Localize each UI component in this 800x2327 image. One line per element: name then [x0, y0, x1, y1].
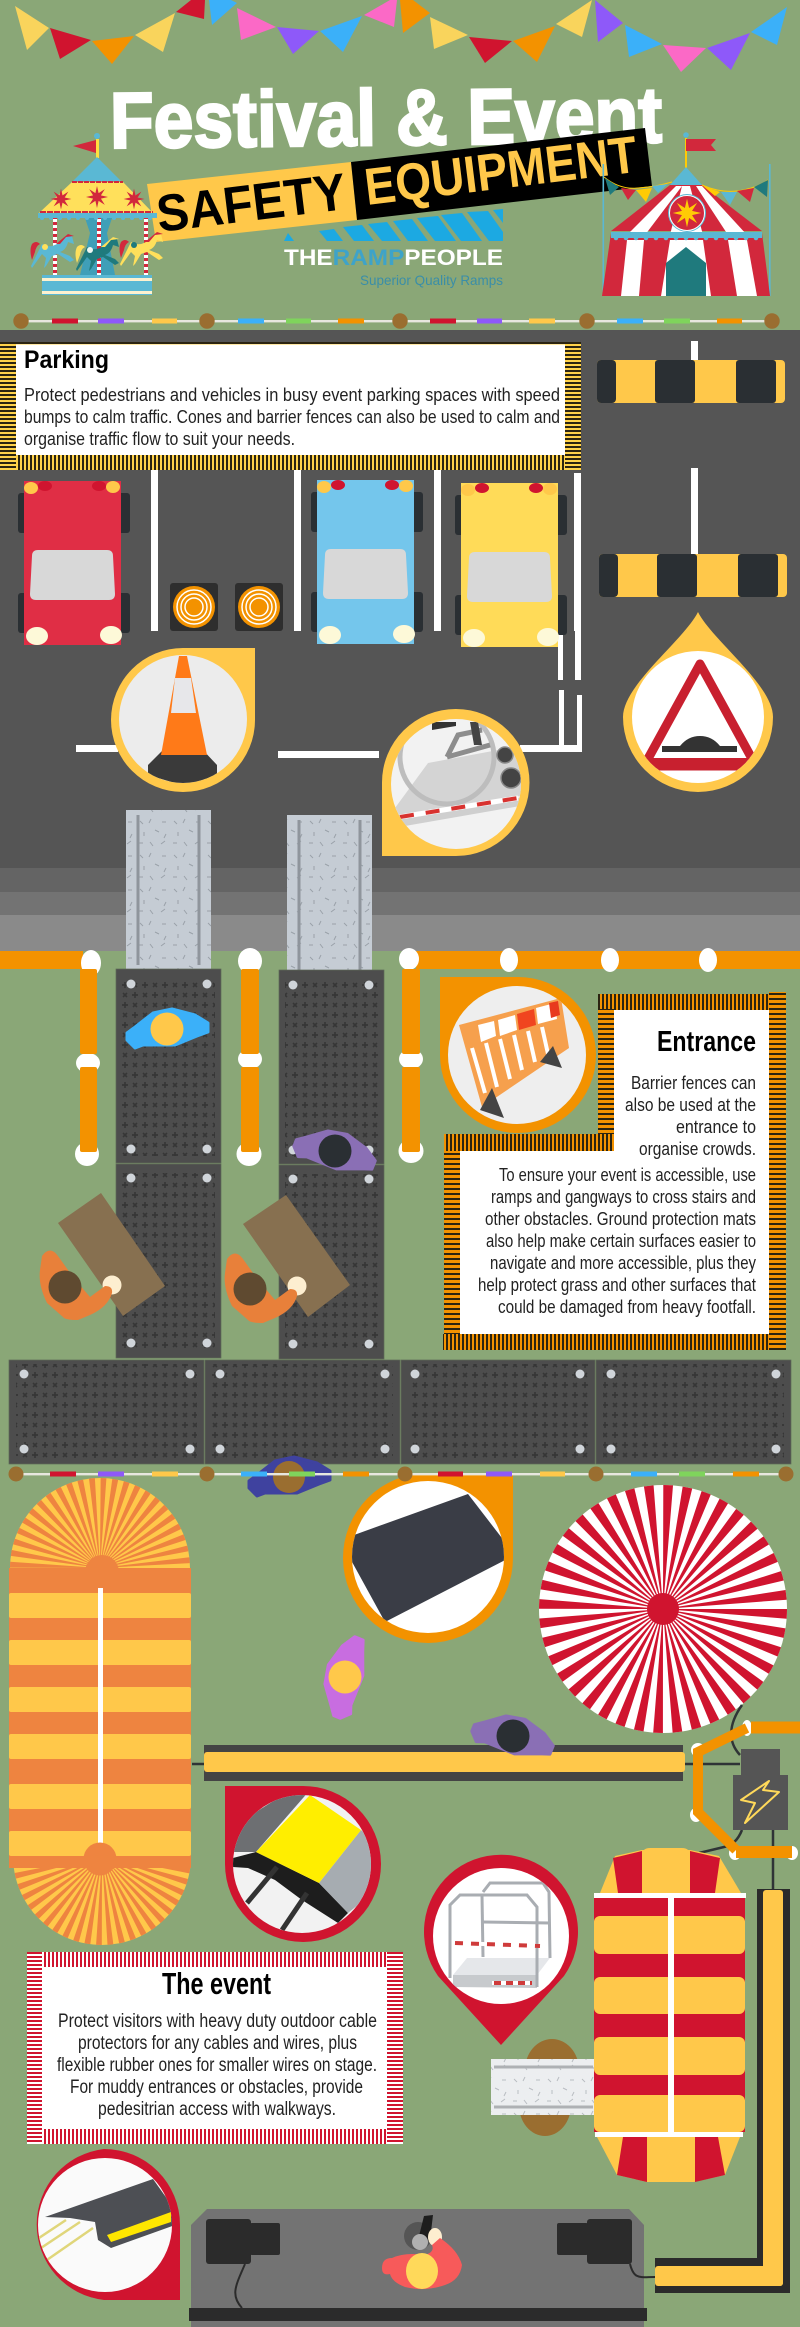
cable protector: right angle	[655, 1889, 790, 2293]
horse: yellow	[120, 232, 163, 266]
text: entrance body: also be used at the	[625, 1095, 756, 1115]
generator	[733, 1749, 788, 1830]
banner: safety equipment	[147, 126, 652, 244]
pin: wheelchair ramp photo	[382, 709, 530, 856]
text: parking body: Protect pedestrians and vehicles in busy event parking spaces with speed	[24, 385, 560, 405]
walkway: left	[126, 810, 211, 969]
person: dark blue	[249, 1457, 330, 1496]
cable protector: long	[204, 1745, 685, 1781]
title: Festival & Event	[110, 70, 662, 165]
pin: cable protector photo	[225, 1786, 381, 1942]
fence: rope line middle	[8, 1466, 794, 1482]
horse: teal	[76, 237, 119, 271]
heading: the event: The event	[162, 1966, 271, 2001]
text: the event body	[57, 2011, 377, 2120]
traffic cones from above	[170, 583, 283, 631]
text: entrance body: could be damaged from heavy footfall.	[498, 1297, 756, 1317]
speed bump 2	[599, 554, 787, 597]
text: the event body: Protect visitors with heavy duty outdoor cable	[58, 2011, 377, 2032]
performer	[382, 2215, 462, 2289]
pin: walkway photo	[424, 1855, 578, 2045]
text: parking body: organise traffic flow to suit your needs.	[24, 429, 295, 449]
text: the event body: protectors for any cables and wires, plus	[78, 2033, 357, 2054]
car: red	[18, 481, 130, 645]
panel: parking	[0, 342, 581, 470]
mud patch	[519, 2039, 579, 2136]
heading: parking: Parking	[24, 346, 109, 374]
road markings	[76, 341, 698, 758]
text: entrance body: other obstacles. Ground protection mats	[485, 1209, 756, 1229]
person: pink	[311, 1631, 378, 1721]
heading: entrance: Entrance	[657, 1026, 756, 1058]
panel: entrance	[443, 992, 786, 1350]
speaker: right	[557, 2219, 632, 2264]
speed bump 1	[597, 360, 785, 403]
text: the event body: flexible rubber ones for smaller wires on stage.	[57, 2055, 377, 2076]
icon: circus tent	[602, 132, 771, 296]
pin: rubber cable cover photo	[36, 2149, 180, 2300]
barrier fence: generator	[690, 1720, 800, 1860]
text: entrance body: entrance to	[676, 1117, 756, 1137]
pin: speed bump sign	[623, 612, 773, 792]
pin: ground mat photo	[340, 1473, 515, 1643]
person carrying board: right	[225, 1195, 350, 1323]
walkway: right	[287, 815, 372, 974]
icon: lightning bolt	[741, 1781, 779, 1823]
text: entrance body	[478, 1073, 756, 1317]
text: the event body: For muddy entrances or obstacles, provide	[70, 2077, 363, 2098]
panel: the event	[27, 1952, 403, 2144]
icon: carousel	[30, 133, 163, 295]
banner: safety equipment: EQUIPMENT	[361, 126, 641, 217]
person: purple on cable protector	[469, 1702, 559, 1769]
text: entrance body: Barrier fences can	[631, 1073, 756, 1093]
cables: power	[192, 1705, 773, 1890]
logo: the ramp people: Superior Quality Ramps	[360, 272, 503, 288]
barrier fences: entrance	[0, 948, 800, 1166]
text: the event body: pedesitrian access with walkways.	[98, 2099, 336, 2120]
person: purple	[291, 1117, 381, 1184]
stage	[189, 2209, 655, 2327]
logo: the ramp people: THERAMP PEOPLE	[284, 245, 503, 270]
logo: the ramp people	[284, 209, 503, 288]
striped tent: orange	[9, 1478, 191, 1945]
pin: barrier fence photo	[440, 977, 596, 1133]
text: parking body: bumps to calm traffic. Cones and barrier fences can also be used to calm and	[24, 407, 560, 427]
ground mats: horizontal	[9, 1360, 791, 1464]
fence: rope line top	[13, 313, 780, 329]
pin: traffic cone photo	[111, 648, 255, 792]
speaker: left	[206, 2219, 280, 2264]
bunting	[15, 0, 787, 72]
text: entrance body: organise crowds.	[639, 1139, 756, 1159]
sunburst: red and white	[539, 1485, 787, 1733]
walkway: horizontal	[491, 2059, 595, 2115]
car: blue	[311, 480, 423, 644]
banner: safety equipment: SAFETY	[153, 163, 349, 244]
road	[0, 330, 800, 951]
person: blue	[127, 1009, 208, 1048]
horse: blue	[30, 234, 74, 268]
text: parking body	[24, 385, 560, 449]
striped tent: red and yellow	[594, 1848, 746, 2182]
person carrying board: left	[40, 1193, 165, 1320]
car: yellow	[455, 483, 567, 647]
ground mats: vertical	[116, 969, 384, 1359]
